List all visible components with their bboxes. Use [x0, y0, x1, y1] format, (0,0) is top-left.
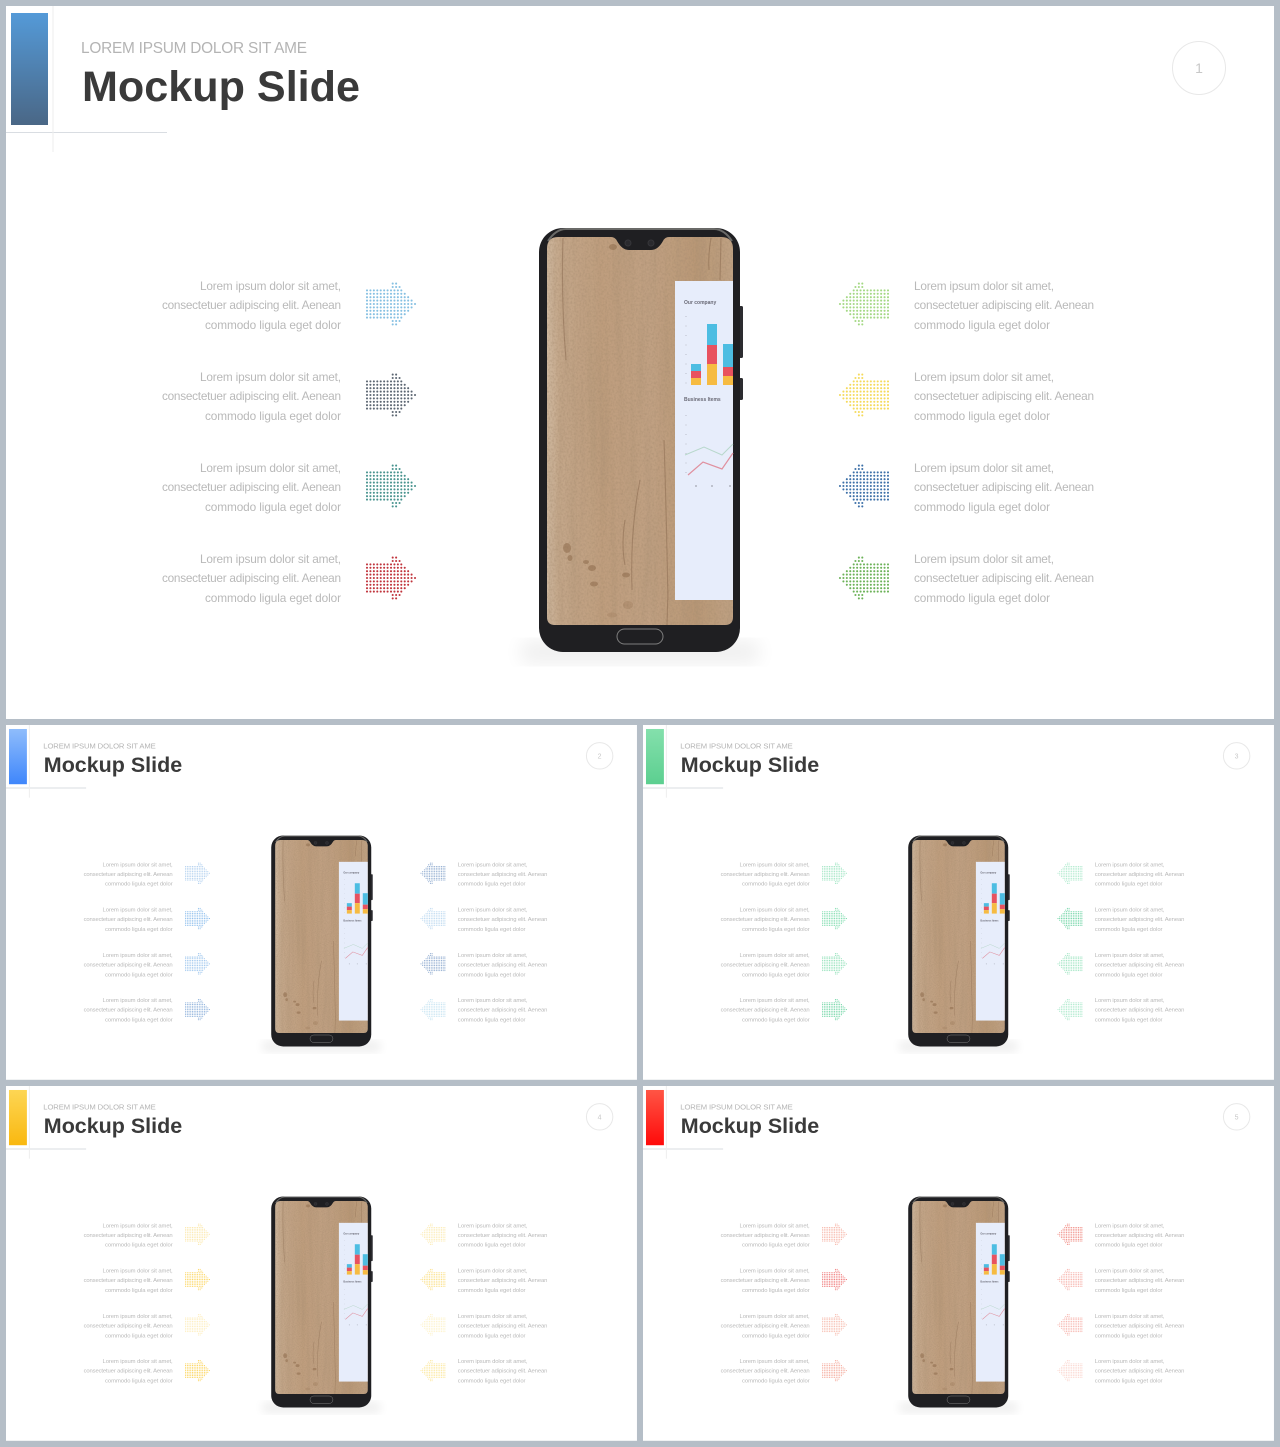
text block: left 3: consectetuer adipiscing elit. Aenean	[721, 962, 810, 968]
text block: right 1: consectetuer adipiscing elit. Aenean	[914, 298, 1094, 312]
accent bar	[646, 1090, 664, 1145]
phone mockup	[262, 1196, 381, 1413]
text block: right 4: Lorem ipsum dolor sit amet,	[458, 998, 528, 1004]
text block: left 1: commodo ligula eget dolor	[105, 1243, 173, 1249]
phone mockup: Business Items	[343, 1281, 362, 1284]
text block: right 4	[1095, 1359, 1184, 1385]
text block: left 3: consectetuer adipiscing elit. Aenean	[84, 962, 173, 968]
text block: left 4: consectetuer adipiscing elit. Aenean	[721, 1008, 810, 1014]
text block: right 2: Lorem ipsum dolor sit amet,	[1095, 908, 1165, 914]
text block: right 3: Lorem ipsum dolor sit amet,	[1095, 1314, 1165, 1320]
text block: left 4: commodo ligula eget dolor	[105, 1379, 173, 1385]
arrow: right 3	[840, 466, 888, 506]
text block: right 3: commodo ligula eget dolor	[458, 1333, 526, 1339]
text block: left 4	[84, 998, 173, 1024]
text block: left 2: Lorem ipsum dolor sit amet,	[740, 908, 810, 914]
text block: right 4: consectetuer adipiscing elit. Aenean	[1095, 1369, 1184, 1375]
text block: left 3	[84, 1314, 173, 1339]
text block: left 4: consectetuer adipiscing elit. Aenean	[84, 1369, 173, 1375]
text block: right 2: Lorem ipsum dolor sit amet,	[1095, 1269, 1165, 1275]
phone mockup: Our company	[343, 1232, 360, 1235]
slide number badge	[1223, 1104, 1250, 1130]
title: Mockup Slide	[681, 754, 819, 777]
arrow: left 4	[186, 1360, 210, 1381]
text block: right 3: Lorem ipsum dolor sit amet,	[914, 461, 1054, 475]
text block: right 4: commodo ligula eget dolor	[1095, 1379, 1163, 1385]
text block: left 2: Lorem ipsum dolor sit amet,	[103, 1269, 173, 1275]
text block: left 2: commodo ligula eget dolor	[742, 1288, 810, 1294]
text block: left 1: Lorem ipsum dolor sit amet,	[103, 1223, 173, 1229]
title: Mockup Slide	[44, 1115, 182, 1138]
text block: left 3: Lorem ipsum dolor sit amet,	[740, 1314, 810, 1320]
text block: left 4	[721, 998, 810, 1024]
text block: left 3	[721, 1314, 810, 1339]
text block: right 4: commodo ligula eget dolor	[914, 591, 1050, 605]
text block: left 2	[721, 908, 810, 933]
arrow: left 3	[186, 1315, 210, 1335]
text block: left 2: consectetuer adipiscing elit. Aenean	[721, 1278, 810, 1284]
subtitle: LOREM IPSUM DOLOR SIT AME	[43, 1102, 156, 1111]
text block: left 2: consectetuer adipiscing elit. Aenean	[84, 917, 173, 923]
phone mockup: Our company	[980, 1232, 997, 1235]
subtitle: LOREM IPSUM DOLOR SIT AME	[680, 741, 793, 750]
arrow: left 4	[823, 999, 847, 1020]
text block: right 3: commodo ligula eget dolor	[914, 500, 1050, 514]
text block: left 3: commodo ligula eget dolor	[105, 972, 173, 978]
text block: left 1: commodo ligula eget dolor	[105, 882, 173, 888]
text block: left 3: consectetuer adipiscing elit. Aenean	[162, 480, 341, 494]
text block: left 3	[162, 461, 341, 514]
text block: right 2	[914, 370, 1094, 423]
text block: left 1: consectetuer adipiscing elit. Aenean	[721, 1233, 810, 1239]
slide number badge: 3	[1235, 753, 1239, 760]
text block: left 4: commodo ligula eget dolor	[205, 591, 341, 605]
subtitle: LOREM IPSUM DOLOR SIT AME	[81, 40, 307, 57]
text block: left 2	[721, 1269, 810, 1294]
text block: left 3: consectetuer adipiscing elit. Aenean	[84, 1323, 173, 1329]
arrow: right 1	[1058, 863, 1082, 883]
text block: right 2	[1095, 908, 1184, 933]
text block: right 2: Lorem ipsum dolor sit amet,	[458, 908, 528, 914]
arrow: left 2	[823, 1269, 847, 1290]
arrow: right 4	[840, 558, 888, 598]
text block: left 4: consectetuer adipiscing elit. Aenean	[84, 1008, 173, 1014]
text block: right 4: commodo ligula eget dolor	[458, 1018, 526, 1024]
text block: left 2: commodo ligula eget dolor	[205, 409, 341, 423]
text block: right 3: consectetuer adipiscing elit. Aenean	[1095, 962, 1184, 968]
slide number badge: 4	[598, 1114, 602, 1121]
text block: right 4: consectetuer adipiscing elit. Aenean	[458, 1008, 547, 1014]
text block: right 2: consectetuer adipiscing elit. Aenean	[1095, 1278, 1184, 1284]
text block: left 1	[721, 862, 810, 888]
text block: left 2: consectetuer adipiscing elit. Aenean	[162, 389, 341, 403]
text block: left 3: commodo ligula eget dolor	[742, 1333, 810, 1339]
phone mockup	[520, 228, 760, 664]
text block: right 1: Lorem ipsum dolor sit amet,	[1095, 862, 1165, 868]
text block: right 3: consectetuer adipiscing elit. Aenean	[1095, 1323, 1184, 1329]
text block: right 4: consectetuer adipiscing elit. Aenean	[1095, 1008, 1184, 1014]
text block: left 4: Lorem ipsum dolor sit amet,	[740, 998, 810, 1004]
phone mockup	[262, 835, 381, 1052]
panel: main slide	[6, 6, 1274, 719]
text block: left 1: consectetuer adipiscing elit. Aenean	[84, 872, 173, 878]
text block: right 4: commodo ligula eget dolor	[1095, 1018, 1163, 1024]
text block: left 2	[84, 908, 173, 933]
panel: blue slide	[6, 725, 637, 1080]
arrow: right 4	[421, 999, 445, 1020]
arrow: right 2	[421, 908, 445, 929]
subtitle: LOREM IPSUM DOLOR SIT AME	[43, 741, 156, 750]
text block: right 2: consectetuer adipiscing elit. Aenean	[914, 389, 1094, 403]
text block: right 2: consectetuer adipiscing elit. Aenean	[458, 917, 547, 923]
arrow: right 4	[1058, 1360, 1082, 1381]
slide number badge: 5	[1235, 1114, 1239, 1121]
panel: yellow slide	[6, 1086, 637, 1441]
text block: right 3	[1095, 1314, 1184, 1339]
text block: left 2: commodo ligula eget dolor	[742, 927, 810, 933]
arrow: left 1	[823, 1224, 847, 1244]
text block: left 2	[162, 370, 341, 423]
slide number badge: 1	[1195, 60, 1203, 76]
text block: left 1	[162, 279, 341, 332]
text block: left 2	[84, 1269, 173, 1294]
text block: left 1: Lorem ipsum dolor sit amet,	[200, 279, 341, 293]
text block: right 1	[458, 1223, 547, 1249]
text block: left 1: Lorem ipsum dolor sit amet,	[103, 862, 173, 868]
text block: left 1: consectetuer adipiscing elit. Aenean	[162, 298, 341, 312]
arrow: left 2	[823, 908, 847, 929]
text block: left 1: consectetuer adipiscing elit. Aenean	[721, 872, 810, 878]
text block: left 4: commodo ligula eget dolor	[105, 1018, 173, 1024]
arrow: right 1	[421, 863, 445, 883]
arrow: right 2	[1058, 1269, 1082, 1290]
text block: left 1	[721, 1223, 810, 1249]
phone mockup: Business Items	[980, 920, 999, 923]
accent bar	[11, 13, 48, 125]
accent bar	[646, 729, 664, 784]
text block: right 1: Lorem ipsum dolor sit amet,	[914, 279, 1054, 293]
text block: left 4: Lorem ipsum dolor sit amet,	[103, 1359, 173, 1365]
slide number badge	[586, 743, 613, 769]
slide number badge	[1223, 743, 1250, 769]
text block: right 1: commodo ligula eget dolor	[458, 882, 526, 888]
text block: right 1: consectetuer adipiscing elit. Aenean	[1095, 872, 1184, 878]
text block: right 1: consectetuer adipiscing elit. Aenean	[458, 872, 547, 878]
text block: right 4	[914, 552, 1094, 605]
text block: right 2: Lorem ipsum dolor sit amet,	[458, 1269, 528, 1275]
text block: left 4	[721, 1359, 810, 1385]
text block: right 2: Lorem ipsum dolor sit amet,	[914, 370, 1054, 384]
text block: right 2: commodo ligula eget dolor	[1095, 927, 1163, 933]
text block: right 3: Lorem ipsum dolor sit amet,	[1095, 953, 1165, 959]
text block: left 1: Lorem ipsum dolor sit amet,	[740, 862, 810, 868]
arrow: left 1	[186, 1224, 210, 1244]
text block: right 4: Lorem ipsum dolor sit amet,	[458, 1359, 528, 1365]
phone mockup: Business Items	[684, 397, 721, 403]
text block: right 4: Lorem ipsum dolor sit amet,	[1095, 1359, 1165, 1365]
arrow: right 3	[421, 954, 445, 974]
text block: right 2	[1095, 1269, 1184, 1294]
arrow: right 3	[1058, 1315, 1082, 1335]
text block: right 3	[1095, 953, 1184, 978]
title: Mockup Slide	[82, 64, 360, 111]
text block: right 4: commodo ligula eget dolor	[458, 1379, 526, 1385]
arrow: left 2	[186, 908, 210, 929]
arrow: right 2	[840, 375, 888, 415]
arrow: right 3	[421, 1315, 445, 1335]
title: Mockup Slide	[681, 1115, 819, 1138]
text block: right 1: consectetuer adipiscing elit. Aenean	[1095, 1233, 1184, 1239]
text block: left 4: commodo ligula eget dolor	[742, 1018, 810, 1024]
text block: left 1: Lorem ipsum dolor sit amet,	[740, 1223, 810, 1229]
phone mockup: Our company	[980, 871, 997, 874]
arrow: left 4	[186, 999, 210, 1020]
text block: right 1	[1095, 862, 1184, 888]
text block: right 3: consectetuer adipiscing elit. Aenean	[458, 962, 547, 968]
text block: right 2: commodo ligula eget dolor	[458, 1288, 526, 1294]
text block: right 4: Lorem ipsum dolor sit amet,	[1095, 998, 1165, 1004]
arrow: right 2	[421, 1269, 445, 1290]
arrow: right 1	[1058, 1224, 1082, 1244]
text block: right 3	[458, 1314, 547, 1339]
text block: left 3: commodo ligula eget dolor	[205, 500, 341, 514]
text block: right 1: commodo ligula eget dolor	[1095, 1243, 1163, 1249]
arrow: left 2	[186, 1269, 210, 1290]
text block: right 2	[458, 908, 547, 933]
text block: left 3: commodo ligula eget dolor	[742, 972, 810, 978]
text block: left 3	[721, 953, 810, 978]
text block: right 4	[458, 1359, 547, 1385]
arrow: right 2	[1058, 908, 1082, 929]
arrow: left 1	[186, 863, 210, 883]
title: Mockup Slide	[44, 754, 182, 777]
phone mockup: Business Items	[343, 920, 362, 923]
text block: right 1	[1095, 1223, 1184, 1249]
arrow: right 4	[421, 1360, 445, 1381]
text block: right 3: Lorem ipsum dolor sit amet,	[458, 953, 528, 959]
arrow: right 3	[1058, 954, 1082, 974]
text block: right 2: consectetuer adipiscing elit. Aenean	[458, 1278, 547, 1284]
text block: right 2: commodo ligula eget dolor	[458, 927, 526, 933]
text block: right 2: commodo ligula eget dolor	[1095, 1288, 1163, 1294]
text block: left 2: Lorem ipsum dolor sit amet,	[740, 1269, 810, 1275]
text block: right 1	[458, 862, 547, 888]
text block: left 1: commodo ligula eget dolor	[742, 1243, 810, 1249]
arrow: left 3	[186, 954, 210, 974]
text block: left 3: commodo ligula eget dolor	[105, 1333, 173, 1339]
slide number badge	[586, 1104, 613, 1130]
text block: right 1: commodo ligula eget dolor	[914, 318, 1050, 332]
arrow: left 1	[823, 863, 847, 883]
phone mockup	[899, 835, 1018, 1052]
arrow: right 1	[840, 284, 888, 324]
arrow: left 3	[367, 466, 415, 506]
text block: right 3: commodo ligula eget dolor	[1095, 1333, 1163, 1339]
arrow: left 4	[367, 558, 415, 598]
text block: right 1	[914, 279, 1094, 332]
subtitle: LOREM IPSUM DOLOR SIT AME	[680, 1102, 793, 1111]
text block: left 1	[84, 1223, 173, 1249]
text block: right 3	[458, 953, 547, 978]
text block: right 2: commodo ligula eget dolor	[914, 409, 1050, 423]
phone mockup: Our company	[684, 300, 716, 306]
text block: left 1: commodo ligula eget dolor	[205, 318, 341, 332]
text block: right 4	[458, 998, 547, 1024]
phone mockup: Business Items	[980, 1281, 999, 1284]
text block: left 2: Lorem ipsum dolor sit amet,	[103, 908, 173, 914]
text block: left 2: Lorem ipsum dolor sit amet,	[200, 370, 341, 384]
text block: left 3	[84, 953, 173, 978]
text block: right 1: consectetuer adipiscing elit. Aenean	[458, 1233, 547, 1239]
text block: left 3: consectetuer adipiscing elit. Aenean	[721, 1323, 810, 1329]
text block: left 3: Lorem ipsum dolor sit amet,	[740, 953, 810, 959]
text block: right 4: consectetuer adipiscing elit. Aenean	[914, 571, 1094, 585]
text block: right 3: Lorem ipsum dolor sit amet,	[458, 1314, 528, 1320]
text block: left 4: Lorem ipsum dolor sit amet,	[200, 552, 341, 566]
slide number badge: 2	[598, 753, 602, 760]
arrow: right 1	[421, 1224, 445, 1244]
text block: left 4: Lorem ipsum dolor sit amet,	[740, 1359, 810, 1365]
text block: right 1: Lorem ipsum dolor sit amet,	[458, 862, 528, 868]
text block: left 1: consectetuer adipiscing elit. Aenean	[84, 1233, 173, 1239]
text block: left 4: Lorem ipsum dolor sit amet,	[103, 998, 173, 1004]
text block: right 3: consectetuer adipiscing elit. Aenean	[458, 1323, 547, 1329]
text block: right 3: consectetuer adipiscing elit. Aenean	[914, 480, 1094, 494]
text block: left 4	[84, 1359, 173, 1385]
text block: right 3: commodo ligula eget dolor	[1095, 972, 1163, 978]
text block: left 4	[162, 552, 341, 605]
text block: right 4: Lorem ipsum dolor sit amet,	[914, 552, 1054, 566]
text block: right 2: consectetuer adipiscing elit. Aenean	[1095, 917, 1184, 923]
panel: red slide	[643, 1086, 1274, 1441]
text block: left 2: commodo ligula eget dolor	[105, 1288, 173, 1294]
text block: right 1: commodo ligula eget dolor	[458, 1243, 526, 1249]
accent bar	[9, 1090, 27, 1145]
text block: right 3	[914, 461, 1094, 514]
text block: left 1	[84, 862, 173, 888]
text block: left 1: commodo ligula eget dolor	[742, 882, 810, 888]
text block: left 2: commodo ligula eget dolor	[105, 927, 173, 933]
text block: right 1: commodo ligula eget dolor	[1095, 882, 1163, 888]
slide number badge	[1172, 42, 1226, 94]
text block: left 3: Lorem ipsum dolor sit amet,	[103, 1314, 173, 1320]
arrow: left 4	[823, 1360, 847, 1381]
panel: green slide	[643, 725, 1274, 1080]
text block: right 4: consectetuer adipiscing elit. Aenean	[458, 1369, 547, 1375]
text block: left 4: commodo ligula eget dolor	[742, 1379, 810, 1385]
arrow: right 4	[1058, 999, 1082, 1020]
text block: left 4: consectetuer adipiscing elit. Aenean	[721, 1369, 810, 1375]
text block: left 2: consectetuer adipiscing elit. Aenean	[84, 1278, 173, 1284]
phone mockup	[899, 1196, 1018, 1413]
text block: right 1: Lorem ipsum dolor sit amet,	[1095, 1223, 1165, 1229]
arrow: left 1	[367, 284, 415, 324]
phone mockup: Our company	[343, 871, 360, 874]
arrow: left 3	[823, 1315, 847, 1335]
text block: right 1: Lorem ipsum dolor sit amet,	[458, 1223, 528, 1229]
text block: right 2	[458, 1269, 547, 1294]
text block: right 4	[1095, 998, 1184, 1024]
arrow: left 2	[367, 375, 415, 415]
text block: left 3: Lorem ipsum dolor sit amet,	[200, 461, 341, 475]
text block: right 3: commodo ligula eget dolor	[458, 972, 526, 978]
text block: left 4: consectetuer adipiscing elit. Aenean	[162, 571, 341, 585]
accent bar	[9, 729, 27, 784]
text block: left 3: Lorem ipsum dolor sit amet,	[103, 953, 173, 959]
text block: left 2: consectetuer adipiscing elit. Aenean	[721, 917, 810, 923]
arrow: left 3	[823, 954, 847, 974]
